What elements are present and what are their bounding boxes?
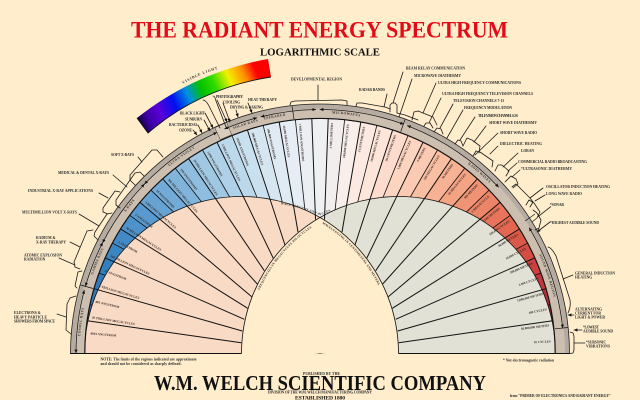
labels: top and right side uses: *HIGHEST AUDIBLE SOUND [550,221,599,225]
labels: top and right side uses: TELEVISION CHANNELS 7-13 [453,99,504,103]
wedge labels: left half: 30,000 MEGACYCLES [282,125,291,158]
panel: central cream arch [242,218,398,354]
labels: top and right side uses: BEAM RELAY COMMUNICATION [406,66,465,70]
wedge labels: left half [90,123,305,338]
wedge labels: right half: 3 MILLIMETERS [329,122,334,148]
wedge labels: left half: 3 BILLION MEGACYCLES [144,200,177,230]
coloured spectrum wedges [85,119,555,353]
labels: top and right side uses: LORAN [521,149,534,153]
wedge labels: right half: 30 CENTIMETERS [384,134,397,162]
wedge labels: left half: .01 ANGSTROM [104,269,127,281]
labels: left side uses: PHOTOGRAPHY [216,95,243,99]
panel: frequencies region (peach) [84,196,398,354]
wedge labels: left half: .0001 ANGSTROM [90,331,117,338]
wedge labels: left half: 3 TRILLION MEGACYCLES [99,284,140,300]
wedge labels: right half: 300 METERS [463,183,479,200]
arch captions: FREQUENCIES IN MEGACYCLES KILOCYCLES [258,226,312,290]
labels: top and right side uses: ULTRA HIGH FREQUENCY COMMUNICATIONS [438,81,521,85]
labels: top and right side uses: GENERAL INDUCTION [575,272,615,276]
panel: wavelengths region (grey) [242,196,556,354]
labels: top and right side uses: MICROWAVE DIATHERMY [414,74,461,78]
labels: top and right side uses: LONG WAVE RADIO [546,192,582,196]
wedge labels: right half: 1 MEGACYCLE [470,194,490,213]
labels: top and right side uses: DIELECTRIC HEATING [500,142,542,146]
labels: top and right side uses: *ULTRASONIC DIATHERMY [521,167,572,171]
rainbow: visible light band: VISIBLE LIGHT [182,66,217,84]
wedge labels: left half: 1 MILLION ANGSTROMS [298,123,305,162]
band region labels: INFRARED [264,114,286,120]
labels: left side uses: RADIUM & [36,236,56,240]
band region labels: ULTRA-VIOLET [168,146,194,166]
wedge labels: right half [329,122,551,344]
wedge labels: right half: 100 MEGACYCLES [423,154,441,181]
arch captions: WAVELENGTHS IN CENTIMETERS AND METERS [322,222,380,285]
labels: top and right side uses: SHORT WAVE RADIO [500,131,537,135]
labels: top and right side uses: HEATING [575,276,592,280]
labels: top and right side uses: DEVELOPMENTAL REGION [291,78,342,82]
wedge labels: right half: 30 METERS [441,163,454,180]
wedge labels: left half: 30 BILLION MEGACYCLES [125,226,162,252]
labels: top and right side uses: *LOWEST [583,326,600,330]
publisher block: PUBLISHED BY THE [303,372,341,376]
labels: top and right side uses: *SUBSONIC [586,340,606,344]
wedge labels: right half: 10 MEGACYCLES [447,173,467,196]
wedge labels: right half: 1,000 MEGACYCLES [396,140,412,170]
labels: left side uses: MEDICAL & DENTAL X-RAYS [58,171,109,175]
band region labels: COSMIC RAYS [78,308,84,336]
wedge labels: right half: 10,000 CYCLES [505,247,527,261]
note: approximate limits: and should not be considered as sharply defined. [100,362,182,366]
publisher block: W.M. WELCH SCIENTIFIC COMPANY [154,371,486,395]
labels: left side uses: INDUSTRIAL X-RAY APPLICATIONS [28,189,93,193]
wedge labels: left half: 1,000 ANGSTROMS [206,150,224,177]
labels: left side uses: COOLING [223,100,240,104]
labels: top and right side uses: RADAR BANDS [359,88,385,92]
wedge labels: right half: 300,000 METERS [509,261,534,275]
labels: left side uses: RADIATION [24,258,46,262]
source credit: from "PRIMER OF ELECTRONICS AND RADIANT ENERGY" [510,394,611,398]
outer band: radiation regions [70,104,570,353]
band region labels: X-RAYS [124,199,134,212]
labels: left side uses: ATOMIC EXPLOSION [24,254,62,258]
labels: left side uses: ELECTRONS & [14,311,41,315]
footnote: not electromagnetic: * Not electromagnetic radiation [503,358,554,362]
labels: top and right side uses [291,66,615,348]
labels: top and right side uses: VIBRATIONS [586,344,610,348]
wedge labels: left half: 300,000 MEGACYCLES [251,132,264,166]
wedge labels: left half: 10,000 ANGSTROMS [235,137,250,167]
wedge labels: right half: 3 METERS [416,147,427,163]
labels: top and right side uses: ALTERNATING [575,308,602,312]
labels: top and right side uses: AUDIBLE SOUND [583,330,613,334]
wedge labels: left half: 30 TRILLION MEGACYCLES [92,315,135,326]
wedge labels: right half: 3,000 METERS [482,206,501,223]
labels: left side uses: HEAT THERAPY [248,98,277,102]
leader lines and brackets: left applications [57,96,252,334]
rainbow: visible light band [136,59,272,134]
note: approximate limits [100,358,197,366]
labels: top and right side uses: COMMERCIAL RADIO BROADCASTING [518,160,587,164]
wedge labels: left half: 1 ANGSTROM [134,213,153,229]
band region labels: SOUND WAVE REGION [539,254,556,297]
labels: left side uses: SHOWERS FROM SPACE [14,320,56,324]
wedge labels: right half: 30,000 METERS [497,233,519,248]
wedge labels: right half: 100,000 MEGACYCLES [342,124,350,158]
wedge labels: left half: 300 BILLION MEGACYCLES [110,254,151,276]
wedge labels: right half: 1,000 CYCLES [518,276,539,287]
subtitle: logarithmic scale: LOGARITHMIC SCALE [260,46,380,58]
band region labels: SOLAR RAYS [232,119,258,130]
labels: top and right side uses: LIGHT & POWER [575,316,605,320]
arch captions [258,202,380,290]
labels: top and right side uses: OSCILLATOR INDUCTION HEATING [546,185,610,189]
wedge labels: left half: 10 ANGSTROMS [155,189,175,209]
note: approximate limits: NOTE: The limits of the regions indicated are approximate [100,358,197,362]
labels: top and right side uses: ULTRA HIGH FREQUENCY TELEVISION CHANNELS [442,92,533,96]
wedge labels: right half: 10 CYCLES [534,339,551,344]
wedge labels: right half: 100,000 CYCLES [488,219,511,236]
band region labels: RADIO WAVES [468,162,490,182]
labels: left side uses: DRYING & BAKING [230,106,263,110]
labels: top and right side uses: CURRENT FOR [575,312,601,316]
labels: top and right side uses: TELEVISION CHANNELS 2-6 [478,114,518,118]
labels: left side uses: BLACK LIGHT [180,112,206,116]
wedge labels: left half: .1 ANGSTROM [117,240,138,254]
labels: left side uses: MULTIMILLION VOLT X-RAYS [22,210,77,214]
labels: left side uses: BACTERICIDAL [169,123,199,127]
labels: left side uses: OZONE [179,128,193,132]
wedge labels: right half: 3,000,000 METERS [517,292,544,303]
wedge labels: left half: 100 ANGSTROMS [179,168,198,191]
wedge labels: left half: 30 MILLION MEGACYCLES [193,159,219,196]
labels: top and right side uses: SHORT WAVE DIATHERMY [489,121,537,125]
title: THE RADIANT ENERGY SPECTRUM [131,18,508,42]
labels: left side uses: HEAVY PARTICLE [14,316,48,320]
wedge labels: right half: 100 CYCLES [528,307,547,315]
labels: left side uses: SOFT X-RAYS [111,153,134,157]
wedge labels: left half: 100,000 ANGSTROMS [266,128,277,160]
wedge labels: right half: 30,000,000 METERS [521,323,550,331]
long radial scale lines [87,119,553,343]
labels: top and right side uses: *SONAR [550,203,564,207]
leader lines and brackets: top and right applications [290,72,585,354]
arch captions: WAVE LENGTHS AND CYCLES [281,202,330,216]
band region labels: MICROWAVES [332,111,360,116]
labels: left side uses: SUNBURN [185,118,202,122]
band region labels: GAMMA RAYS [91,248,104,274]
wedge labels: left half: .001 ANGSTROM [94,300,120,309]
chart: semicircular radiant energy spectrum [70,104,570,354]
labels: top and right side uses: FREQUENCY MODULATION [464,106,512,110]
labels: left side uses: X-RAY THERAPY [36,240,66,244]
wedge labels: right half: 3 CENTIMETERS [357,126,366,153]
band region labels [78,111,556,336]
wedge labels: left half: 300 MILLION MEGACYCLES [167,178,199,214]
publisher block: DIVISION OF THE W.M. WELCH MANUFACTURING COMPANY [268,390,372,394]
wedge labels: left half: 3 MILLION MEGACYCLES [221,143,241,182]
wedge labels: right half: 10,000 MEGACYCLES [369,130,382,162]
labels: left side uses [14,95,277,324]
band arrows: region extents [76,109,563,353]
